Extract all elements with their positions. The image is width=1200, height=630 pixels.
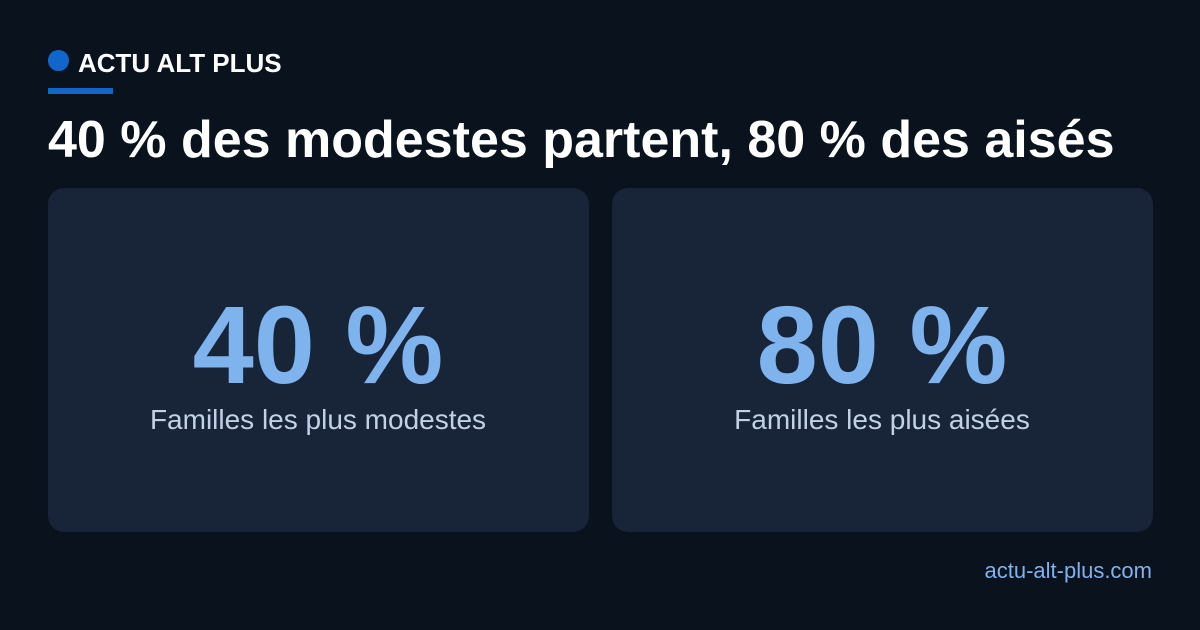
- brand underline: [48, 88, 112, 94]
- title: 40 % des modestes partent, 80 % des aisés: [48, 111, 1115, 169]
- icon: brand dot: [48, 50, 68, 70]
- panel background: [612, 188, 1152, 532]
- panel: modest families: [48, 188, 589, 532]
- brand name: ACTU ALT PLUS: [78, 48, 282, 78]
- panel: wealthy families: [612, 188, 1153, 532]
- stat label: Familles les plus modestes: [150, 404, 486, 435]
- source website: actu-alt-plus.com: [984, 558, 1152, 583]
- panel background: [48, 188, 588, 532]
- stat label: Familles les plus aisées: [734, 404, 1030, 435]
- stat: 80 %: 80 %: [757, 284, 1007, 407]
- stat: 40 %: 40 %: [193, 284, 443, 407]
